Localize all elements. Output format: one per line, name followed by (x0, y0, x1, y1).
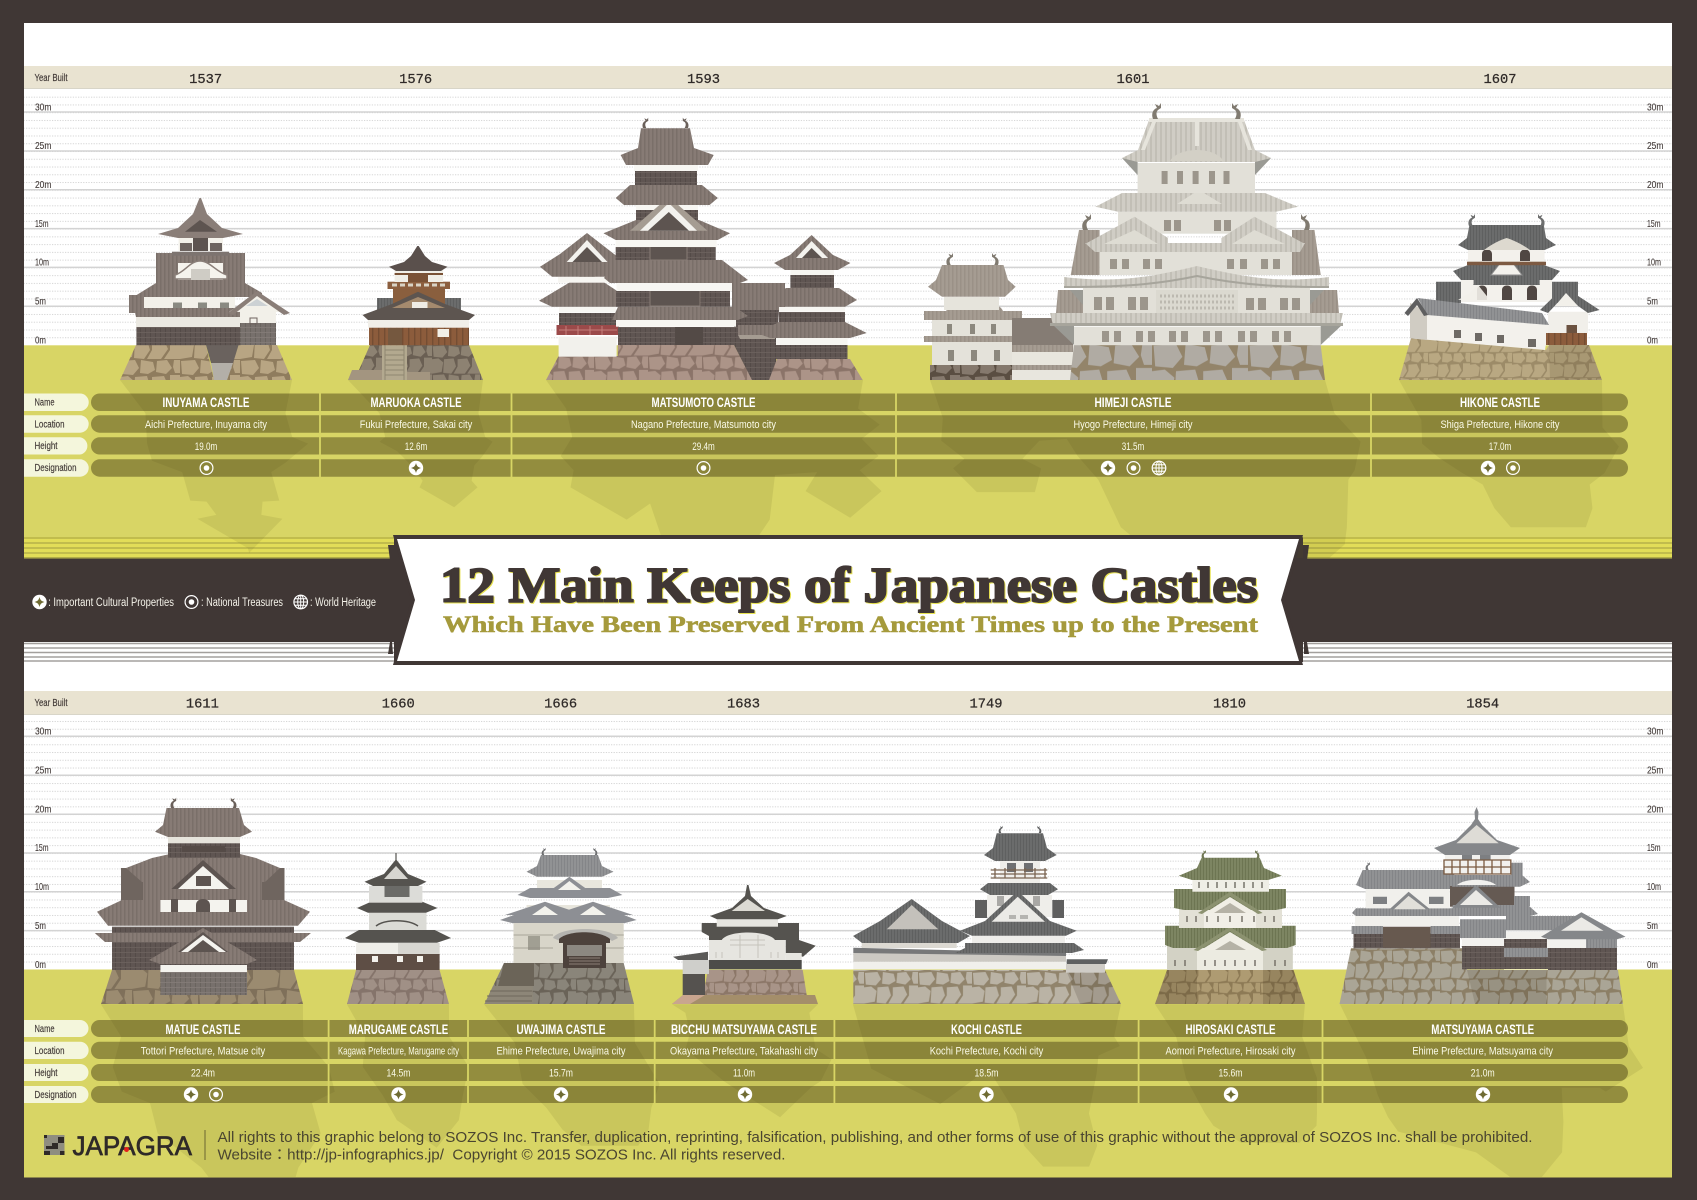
castle: Inuyama (120, 198, 292, 380)
data table: top row labels and pills: HIMEJI CASTLE (1094, 395, 1172, 410)
data table: bottom row labels and pills: Designation (34, 1090, 76, 1101)
castle: Hikone (1399, 214, 1602, 380)
height scale labels: 15m (1647, 842, 1661, 854)
data table: bottom row labels and pills: 15.7m (549, 1068, 573, 1080)
data table: top row labels and pills: Location (34, 420, 64, 430)
data table: bottom row labels and pills: Aomori Prefecture, Hirosaki city (1166, 1046, 1296, 1058)
year axis labels: bottom: Year Built (34, 698, 68, 709)
height scale labels: 30m (1647, 102, 1664, 114)
legend (32, 595, 376, 609)
data table: top row labels and pills: 17.0m (1489, 441, 1511, 453)
height scale labels: 5m (35, 920, 46, 932)
data table: top row labels and pills: Hyogo Prefecture, Himeji city (1074, 419, 1193, 431)
castle: Matsumoto (539, 118, 867, 380)
height scale labels: 20m (1647, 804, 1664, 816)
data table: bottom row labels and pills: Height (34, 1068, 58, 1079)
data table: bottom row labels and pills: MATUE CASTLE (166, 1022, 240, 1037)
copyright text (218, 1129, 1532, 1164)
data table: bottom row labels and pills: 14.5m (386, 1068, 410, 1080)
copyright text: Website：http://jp-infographics.jp/ Copyright © 2015 SOZOS Inc. All rights reserved. (218, 1146, 786, 1164)
grey stripes (24, 642, 1672, 662)
castle shadows: bottom row (101, 1004, 1643, 1177)
castle: Uwajima (484, 848, 637, 1004)
data table: bottom row labels and pills: Name (34, 1024, 55, 1035)
data table: top row labels and pills: Nagano Prefecture, Matsumoto city (631, 419, 776, 431)
height scale labels: 0m (35, 959, 46, 971)
data table: bottom row labels and pills: Kagawa Prefecture, Marugame city (338, 1046, 459, 1058)
logo: JAPAGRA: JAPAGRA (72, 1131, 192, 1161)
title banner (388, 535, 1309, 665)
height scale labels: 30m (35, 726, 52, 738)
data table: top row labels and pills: Shiga Prefecture, Hikone city (1440, 419, 1560, 431)
data table: top row labels and pills (24, 392, 1628, 478)
data table: bottom row labels and pills: MATSUYAMA CASTLE (1431, 1022, 1534, 1037)
main title: 12 Main Keeps of Japanese Castles (440, 556, 1258, 612)
height scale labels: 10m (35, 881, 49, 893)
data table: bottom row labels and pills (24, 1019, 1628, 1104)
legend: : World Heritage (310, 597, 376, 609)
year axis labels: bottom (34, 696, 1499, 712)
data table: bottom row labels and pills: Okayama Prefecture, Takahashi city (670, 1046, 818, 1058)
year axis labels: bottom: 1611 (186, 696, 219, 712)
data table: bottom row labels and pills: BICCHU MATSUYAMA CASTLE (671, 1022, 817, 1037)
height scale labels: 30m (35, 102, 52, 114)
legend: : National Treasures (201, 597, 283, 609)
data table: bottom row labels and pills: 11.0m (733, 1068, 755, 1080)
height scale labels: 15m (35, 842, 49, 854)
data table: bottom row labels and pills: Ehime Prefecture, Matsuyama city (1412, 1046, 1553, 1058)
year axis labels: top: 1601 (1116, 72, 1150, 88)
castle shadows: top row (120, 380, 1614, 558)
height scale labels: 20m (35, 179, 52, 191)
data table: bottom row labels and pills: UWAJIMA CASTLE (516, 1022, 606, 1037)
castle: Himeji (924, 103, 1343, 380)
height scale labels: 10m (1647, 881, 1661, 893)
data table: bottom row labels and pills: Location (34, 1046, 64, 1057)
height scale labels: 25m (35, 764, 52, 776)
height scale labels: 25m (35, 140, 52, 152)
height scale labels: 25m (1647, 764, 1664, 776)
year axis labels: bottom: 1666 (544, 696, 577, 712)
castle: Matsue (95, 798, 311, 1004)
year axis labels: top: 1607 (1484, 72, 1516, 88)
copyright text: All rights to this graphic belong to SOZOS Inc. Transfer, duplication, reprinting, falsification, publishing, and other forms of use of this graphic without the approval of SOZOS Inc. shall be prohibited. (218, 1129, 1532, 1146)
height scale labels: 15m (1647, 218, 1661, 230)
yellow stripes (24, 537, 1672, 558)
data table: bottom row labels and pills: Tottori Prefecture, Matsue city (141, 1046, 266, 1058)
year axis labels: bottom: 1810 (1213, 696, 1246, 712)
height scale labels: 20m (35, 804, 52, 816)
year axis labels: bottom: 1854 (1466, 696, 1499, 712)
height scale labels: 5m (35, 296, 46, 308)
data table: bottom row labels and pills: 22.4m (191, 1068, 215, 1080)
data table: bottom row labels and pills: 18.5m (974, 1068, 998, 1080)
year axis labels: bottom: 1683 (727, 696, 760, 712)
height scale labels: 0m (1647, 959, 1658, 971)
height scale labels: 0m (35, 334, 46, 346)
height scale labels: 15m (35, 218, 49, 230)
subtitle: Which Have Been Preserved From Ancient Times up to the Present (443, 612, 1258, 638)
data table: bottom row labels and pills: HIROSAKI CASTLE (1186, 1022, 1276, 1037)
legend: : Important Cultural Properties (48, 597, 174, 609)
panel: bottom chart (24, 662, 1672, 1178)
data table: bottom row labels and pills: Ehime Prefecture, Uwajima city (496, 1046, 626, 1058)
castle: Hirosaki (1155, 850, 1305, 1004)
data table: top row labels and pills: HIKONE CASTLE (1460, 395, 1540, 410)
data table: bottom row labels and pills: 15.6m (1218, 1068, 1242, 1080)
year axis labels: top (34, 72, 1516, 88)
height scale labels: 0m (1647, 334, 1658, 346)
height scale labels: 5m (1647, 920, 1658, 932)
castle: Matsuyama (1340, 807, 1626, 1004)
data table: top row labels and pills: Name (34, 398, 55, 408)
data table: top row labels and pills: Aichi Prefecture, Inuyama city (145, 419, 267, 431)
height scale labels: 25m (1647, 140, 1664, 152)
castle: Bicchu Matsuyama (672, 885, 818, 1004)
year axis labels: bottom: 1749 (970, 696, 1002, 712)
height scale labels: 5m (1647, 296, 1658, 308)
height scale labels: 10m (35, 256, 49, 268)
data table: top row labels and pills: MARUOKA CASTLE (370, 395, 462, 410)
panel: top chart (24, 23, 1672, 537)
data table: top row labels and pills: 31.5m (1122, 441, 1144, 453)
data table: bottom row labels and pills: Kochi Prefecture, Kochi city (930, 1046, 1044, 1058)
height scale labels (35, 102, 1664, 971)
footer divider (204, 1130, 206, 1160)
castle: Kochi (853, 826, 1121, 1004)
year axis labels: top: 1537 (189, 72, 222, 88)
year axis labels: bottom: 1660 (382, 696, 415, 712)
data table: bottom row labels and pills: MARUGAME CASTLE (349, 1022, 448, 1037)
height scale labels: 20m (1647, 179, 1664, 191)
data table: bottom row labels and pills: KOCHI CASTLE (951, 1022, 1022, 1037)
data table: top row labels and pills: 19.0m (195, 441, 217, 453)
year axis labels: top: Year Built (34, 73, 68, 84)
data table: bottom row labels and pills: 21.0m (1471, 1068, 1495, 1080)
data table: top row labels and pills: 12.6m (405, 441, 427, 453)
data table: top row labels and pills: Height (34, 441, 58, 452)
data table: top row labels and pills: MATSUMOTO CASTLE (652, 395, 756, 410)
height scale labels: 30m (1647, 726, 1664, 738)
castle: Maruoka (348, 246, 483, 380)
data table: top row labels and pills: INUYAMA CASTLE (162, 395, 250, 410)
year axis labels: top: 1576 (399, 72, 432, 88)
year axis labels: top: 1593 (687, 72, 720, 88)
data table: top row labels and pills: Fukui Prefecture, Sakai city (360, 419, 473, 431)
castle: Marugame (345, 853, 451, 1004)
height scale labels: 10m (1647, 256, 1661, 268)
data table: top row labels and pills: Designation (34, 463, 76, 474)
data table: top row labels and pills: 29.4m (692, 441, 715, 453)
